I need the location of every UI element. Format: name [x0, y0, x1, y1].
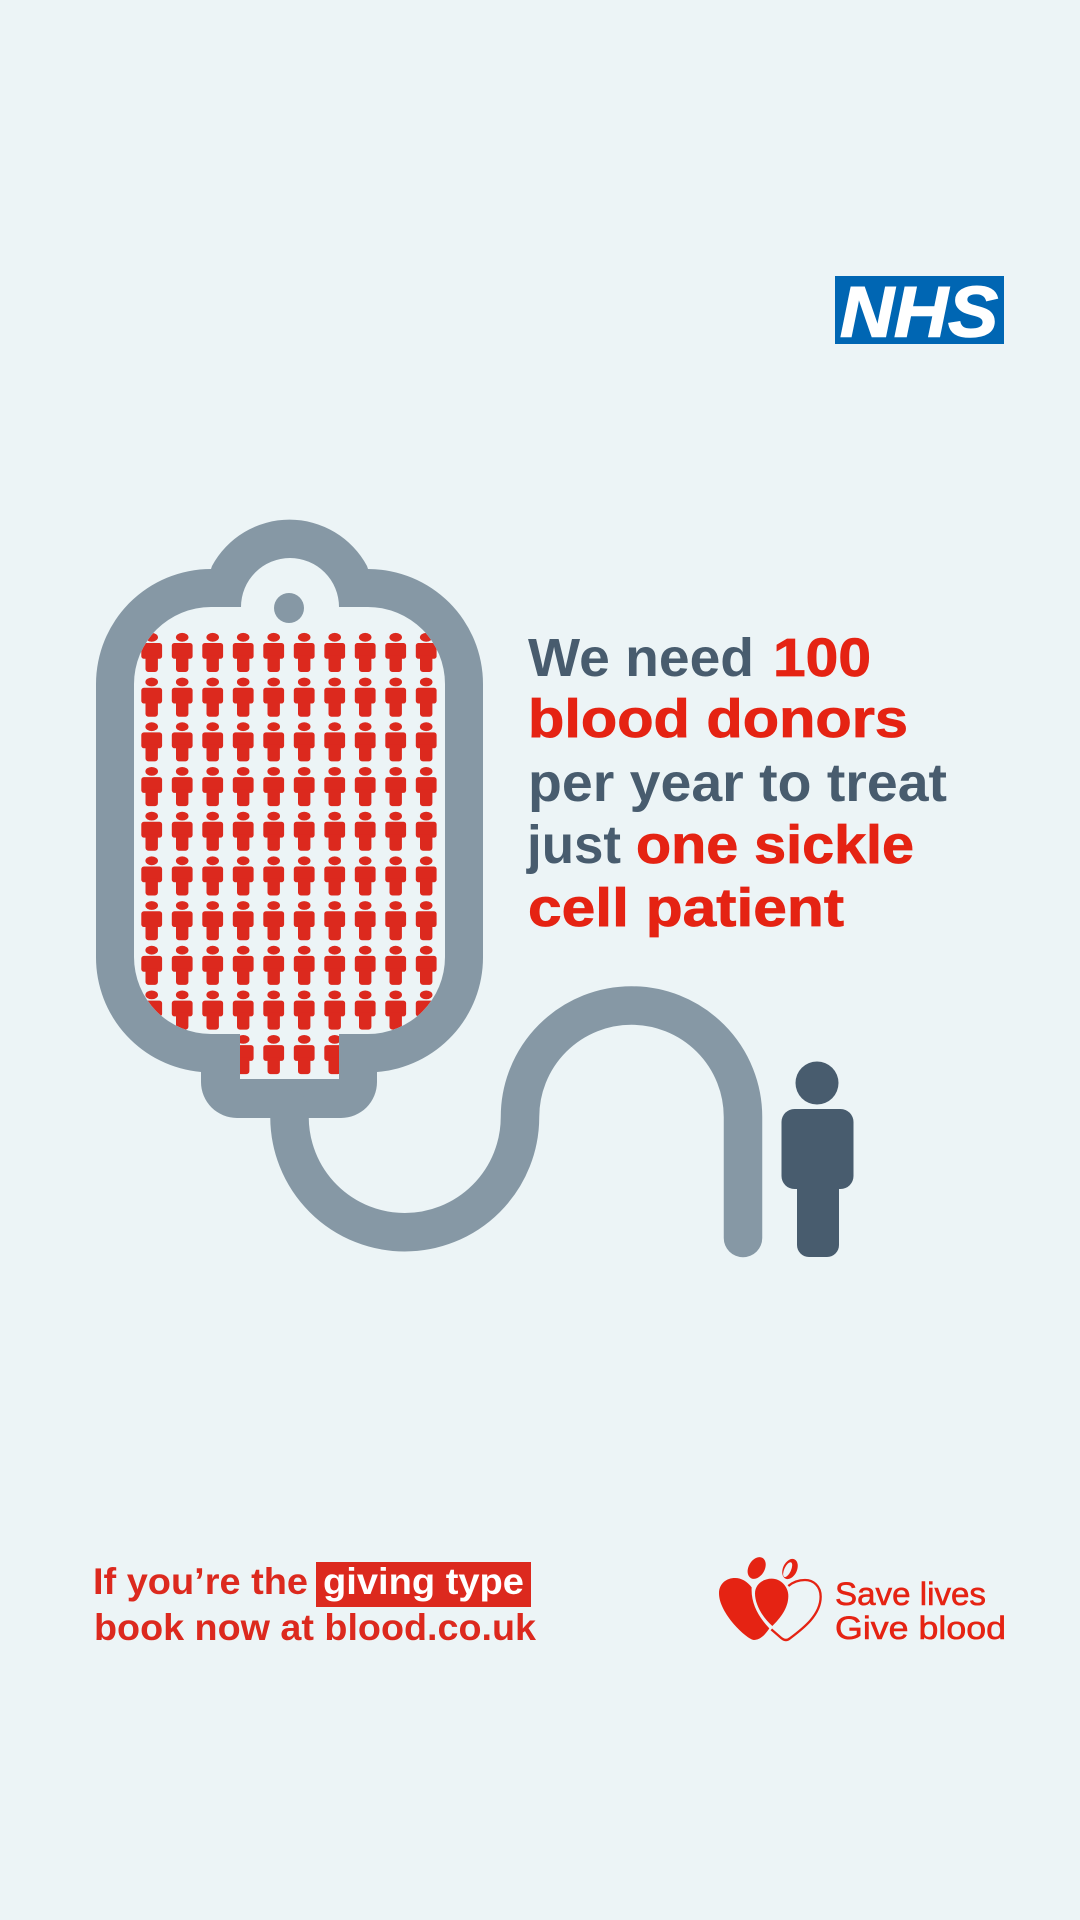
logo text: save lives give blood: Give blood — [835, 1610, 1006, 1646]
call to action: If you’re the — [93, 1561, 308, 1602]
headline text: 100 — [773, 628, 871, 688]
headline text: one sickle — [636, 815, 914, 875]
headline text: cell patient — [528, 878, 844, 938]
icon: transfusion tube — [290, 1006, 743, 1238]
logo: give blood hearts — [719, 1554, 821, 1640]
call to action: book now at blood.co.uk — [94, 1607, 536, 1648]
call to action — [93, 1561, 536, 1648]
icon: patient figure — [782, 1062, 854, 1257]
headline text: We need — [528, 628, 754, 688]
logo text: save lives give blood: Save lives — [835, 1576, 986, 1612]
logo text: save lives give blood — [835, 1576, 1006, 1646]
pictogram: red donors filling the bag — [141, 633, 437, 1074]
NHS logo: NHS — [840, 274, 998, 352]
headline text — [526, 628, 947, 938]
icon: bag hanging hole dot — [274, 593, 304, 623]
icon: blood bag outline — [96, 520, 483, 1118]
headline text: just — [526, 815, 621, 875]
call to action: giving type — [323, 1561, 524, 1602]
headline text: per year to treat — [528, 753, 947, 813]
headline text: blood donors — [528, 689, 908, 749]
